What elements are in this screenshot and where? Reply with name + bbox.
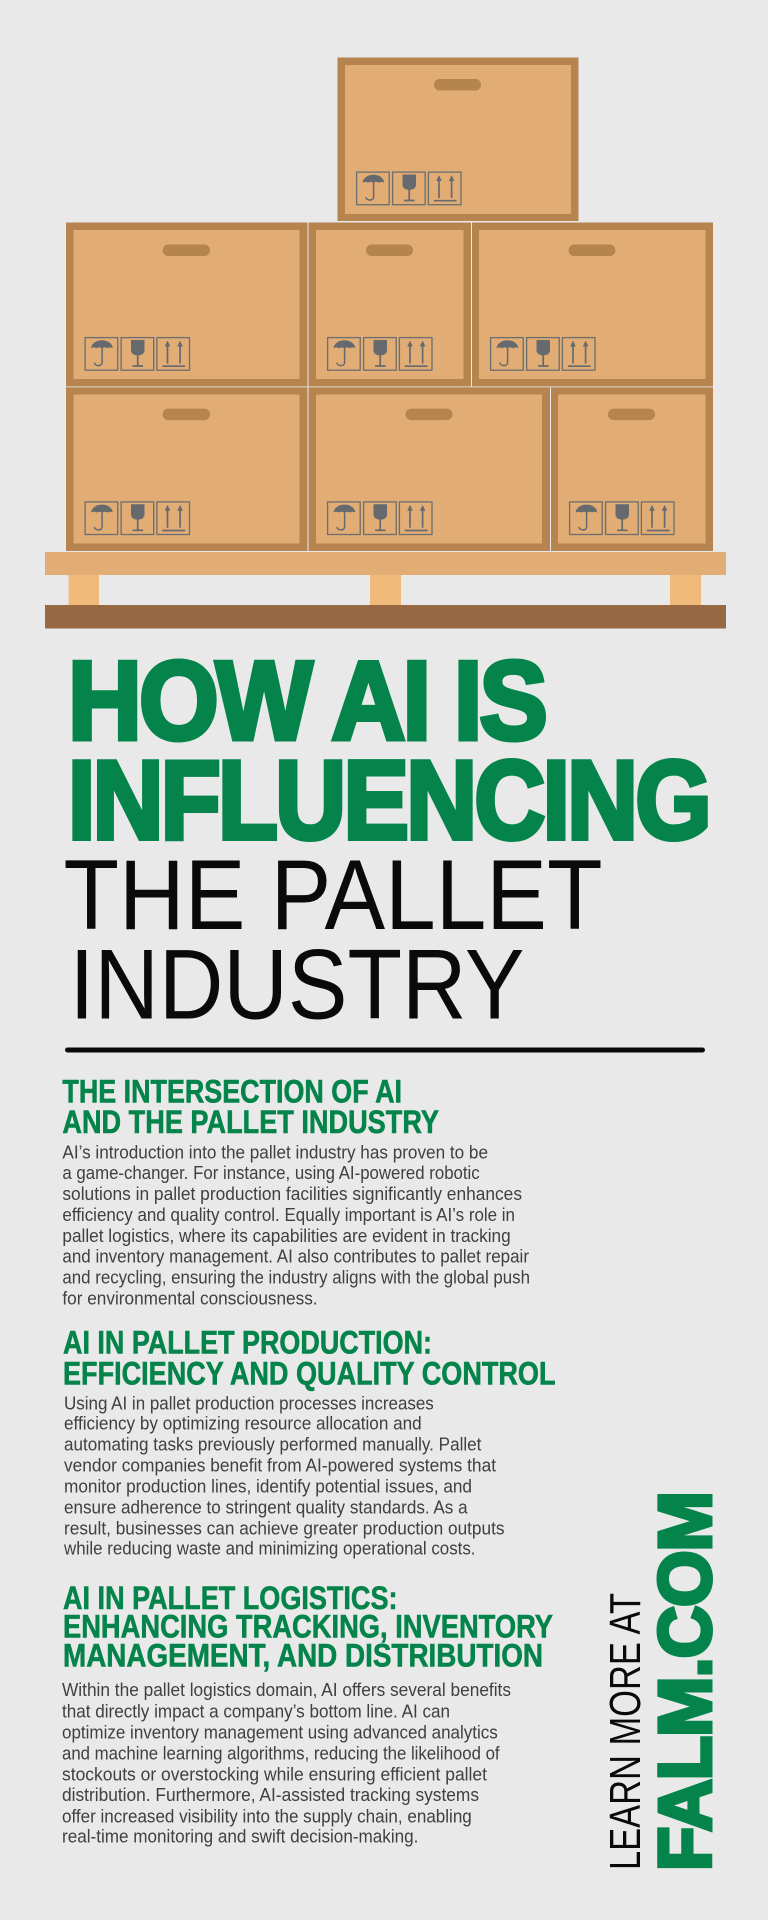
heading: AI IN PALLET PRODUCTION: [63,1324,432,1360]
body text: solutions in pallet production facilities significantly enhances [62,1184,522,1204]
heading: EFFICIENCY AND QUALITY CONTROL [63,1355,556,1391]
body text: a game-changer. For instance, using AI-powered robotic [62,1163,480,1183]
heading [63,1324,556,1391]
box: middle row left [66,222,308,386]
body text: AI’s introduction into the pallet industry has proven to be [62,1142,488,1162]
heading: AND THE PALLET INDUSTRY [62,1104,439,1140]
body text [63,1393,504,1558]
body text: that directly impact a company’s bottom line. AI can [62,1701,450,1721]
body text: while reducing waste and minimizing operational costs. [63,1538,476,1558]
section: AI in pallet production [63,1324,556,1558]
body text: offer increased visibility into the supply chain, enabling [62,1806,472,1826]
title: HOW AI IS [68,638,545,763]
body text: automating tasks previously performed manually. Pallet [64,1435,481,1455]
heading [63,1580,553,1674]
cta url: FALM.COM [644,1492,727,1871]
body text: result, businesses can achieve greater production outputs [64,1518,504,1538]
body text: and recycling, ensuring the industry aligns with the global push [62,1268,530,1288]
title divider [65,1048,705,1052]
body text: stockouts or overstocking while ensuring efficient pallet [62,1765,487,1785]
body text: Within the pallet logistics domain, AI offers several benefits [62,1680,511,1700]
body text: monitor production lines, identify potential issues, and [64,1476,472,1496]
body text: for environmental consciousness. [62,1288,318,1308]
box: bottom row right [551,387,713,551]
call to action: learn more at falm.com [601,1492,727,1871]
body text: vendor companies benefit from AI-powered systems that [64,1456,496,1476]
box: top row [338,58,578,221]
heading [62,1073,439,1140]
heading: ENHANCING TRACKING, INVENTORY [63,1609,553,1645]
body text: and machine learning algorithms, reducing the likelihood of [62,1743,501,1763]
body text: efficiency by optimizing resource allocation and [64,1413,422,1433]
body text: ensure adherence to stringent quality standards. As a [64,1497,469,1517]
body text: pallet logistics, where its capabilities are evident in tracking [62,1226,511,1246]
title: INDUSTRY [70,929,524,1040]
title: THE PALLET [64,840,602,951]
heading: AI IN PALLET LOGISTICS: [63,1580,398,1616]
heading: MANAGEMENT, AND DISTRIBUTION [63,1638,543,1674]
body text: real-time monitoring and swift decision-making. [62,1827,418,1847]
body text: and inventory management. AI also contributes to pallet repair [62,1247,529,1267]
box: middle row centre [308,222,471,386]
body text [62,1142,530,1308]
body text: distribution. Furthermore, AI-assisted tracking systems [62,1785,479,1805]
box: bottom row left [66,387,308,551]
title [64,638,709,1040]
body text [62,1680,511,1847]
body text: optimize inventory management using advanced analytics [62,1722,498,1742]
illustration: stacked boxes on pallet [45,58,726,628]
box: bottom row centre [308,387,550,551]
cta label: LEARN MORE AT [601,1593,650,1870]
heading: THE INTERSECTION OF AI [62,1073,402,1109]
section: AI in pallet logistics [62,1580,553,1847]
body text: efficiency and quality control. Equally important is AI’s role in [62,1205,515,1225]
section: the intersection of AI and the pallet industry [62,1073,530,1308]
body text: Using AI in pallet production processes increases [64,1393,434,1413]
pallet [45,552,726,628]
box: middle row right [472,222,713,386]
